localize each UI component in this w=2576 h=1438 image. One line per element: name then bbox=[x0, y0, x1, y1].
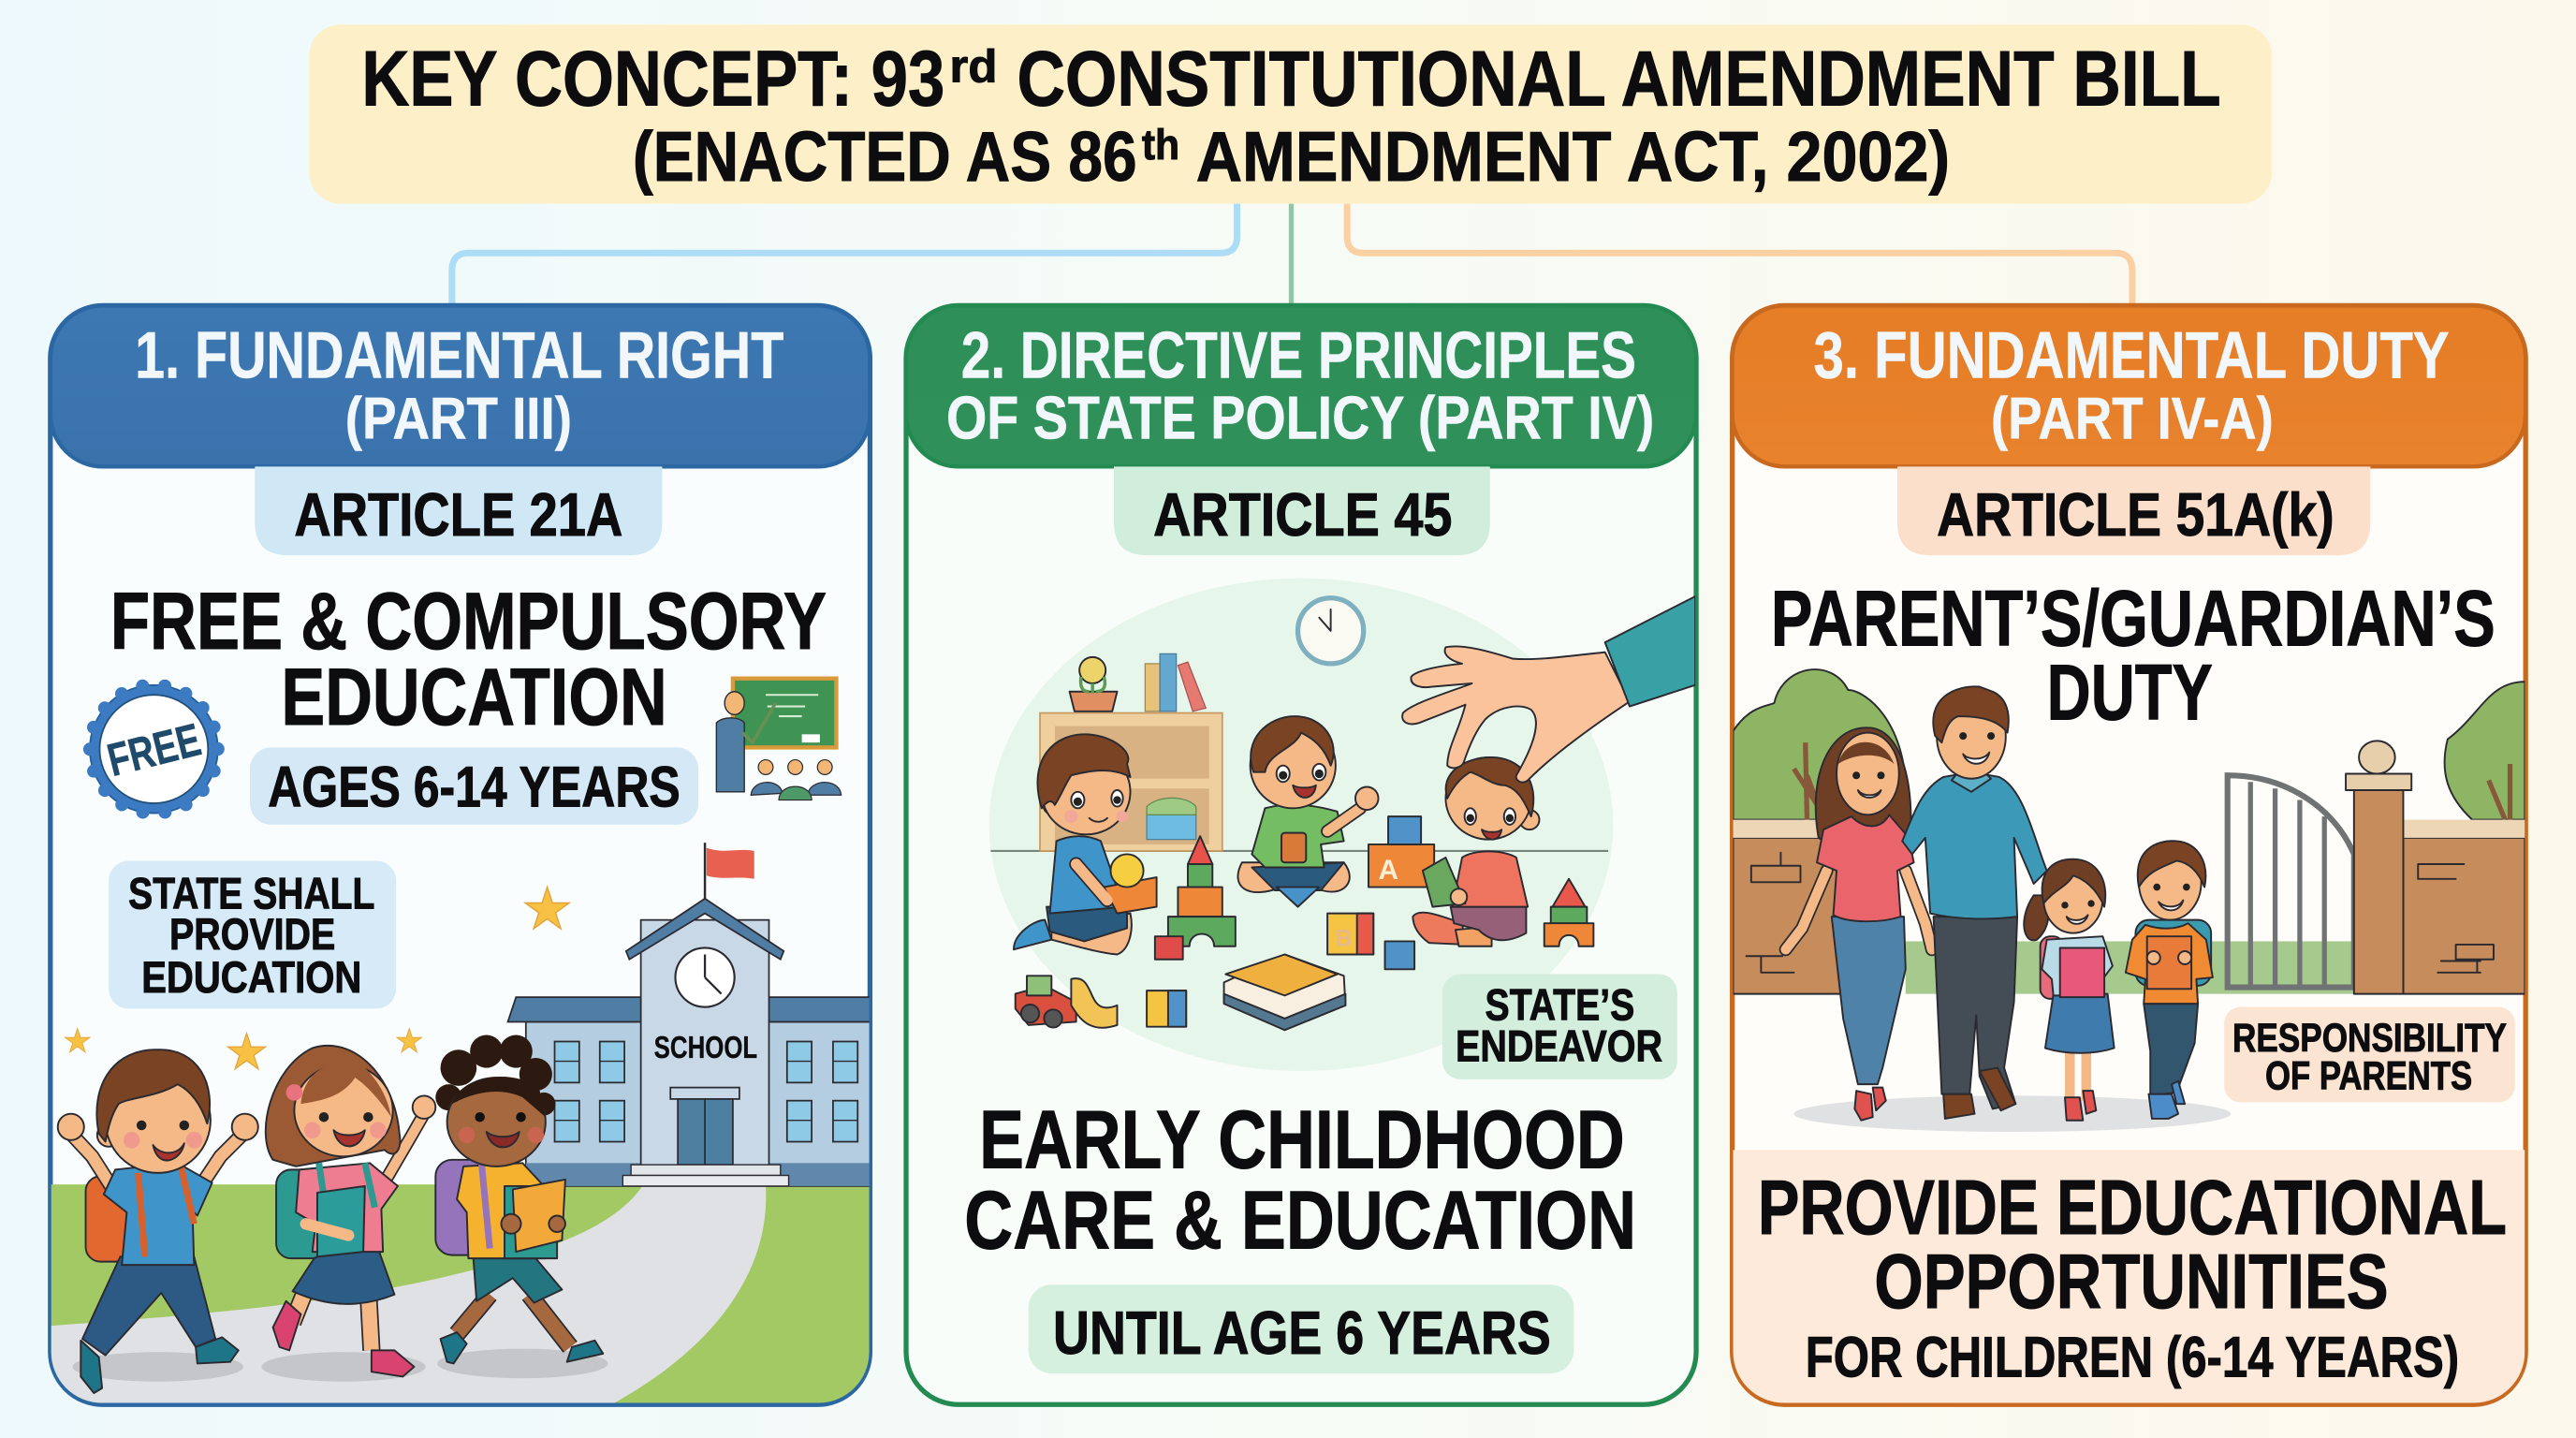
title banner: KEY CONCEPT: 93 bbox=[361, 35, 944, 122]
heading: free and compulsory education: EDUCATION bbox=[281, 653, 667, 742]
article pill: 45 bbox=[1114, 466, 1490, 555]
child: boy waving bbox=[58, 1049, 258, 1393]
title banner: th bbox=[1142, 121, 1179, 169]
header: fundamental duty: 3. FUNDAMENTAL DUTY bbox=[1814, 318, 2450, 392]
heading: free and compulsory education: FREE & COMPULSORY bbox=[110, 577, 827, 667]
age pill: 6-14 years: AGES 6-14 YEARS bbox=[268, 756, 681, 820]
illustration: early childhood play room bbox=[989, 579, 1695, 1071]
title banner: (ENACTED AS 86 bbox=[633, 117, 1137, 196]
title banner: rd bbox=[950, 42, 997, 93]
illustration: family at school gate bbox=[1734, 669, 2525, 1406]
panel: fundamental right bbox=[50, 305, 874, 1406]
icon: teacher at chalkboard bbox=[716, 679, 842, 800]
article pill: 21A: ARTICLE 21A bbox=[294, 480, 622, 549]
heading: parent's guardian's duty: DUTY bbox=[2047, 649, 2213, 737]
school building bbox=[508, 843, 874, 1186]
child: boy with books bbox=[435, 1034, 608, 1378]
header: directive principles bbox=[906, 305, 1696, 466]
callout: state shall provide education: PROVIDE bbox=[169, 910, 335, 960]
header: directive principles: OF STATE POLICY (PART IV) bbox=[946, 384, 1654, 452]
panel: directive principles bbox=[906, 305, 1696, 1404]
banner text: provide educational opportunities bbox=[1758, 1165, 2507, 1389]
shelf with plant and books bbox=[1040, 653, 1222, 851]
title banner: CONSTITUTIONAL AMENDMENT BILL bbox=[1017, 35, 2221, 122]
callout: state's endeavor: STATE’S bbox=[1486, 981, 1634, 1031]
father bbox=[1902, 686, 2047, 1119]
callout: responsibility of parents: RESPONSIBILITY bbox=[2232, 1016, 2507, 1061]
heading: free and compulsory education bbox=[110, 577, 827, 742]
child: seated boy with chick bbox=[1014, 734, 1157, 954]
child: girl with book bbox=[261, 1046, 435, 1382]
age pill: until 6 years bbox=[1029, 1284, 1573, 1373]
connector: title to directive principles bbox=[1290, 204, 1293, 305]
icon: free badge bbox=[90, 685, 218, 814]
heading: early childhood care and education: CARE & EDUCATION bbox=[964, 1175, 1636, 1267]
callout: responsibility of parents bbox=[2224, 1007, 2515, 1102]
callout: state shall provide education: EDUCATION bbox=[141, 953, 361, 1003]
school building: SCHOOL bbox=[654, 1031, 757, 1065]
header: fundamental duty bbox=[1733, 305, 2525, 466]
letter blocks and toys: B bbox=[1336, 927, 1353, 952]
connector: title to fundamental right bbox=[452, 204, 1237, 305]
block tower bbox=[1155, 836, 1236, 960]
banner text: provide educational opportunities: OPPORTUNITIES bbox=[1874, 1239, 2389, 1325]
daughter bbox=[2024, 859, 2115, 1121]
header: fundamental right bbox=[51, 305, 870, 466]
callout: state's endeavor bbox=[1442, 975, 1677, 1079]
callout: responsibility of parents: OF PARENTS bbox=[2265, 1053, 2472, 1098]
ground shadow bbox=[1793, 1095, 2231, 1132]
lawn bbox=[50, 1184, 871, 1406]
illustration: school scene bbox=[50, 843, 874, 1406]
lower banner background bbox=[1734, 1150, 2525, 1406]
son bbox=[2126, 841, 2213, 1119]
article pill: 51A(k) bbox=[1897, 466, 2370, 555]
panel: fundamental duty bbox=[1733, 305, 2525, 1406]
walkway bbox=[51, 1186, 766, 1406]
article pill: 51A(k): ARTICLE 51A(k) bbox=[1937, 480, 2334, 549]
child: seated boy in red bbox=[1412, 757, 1539, 946]
icon: free badge: FREE bbox=[103, 714, 206, 786]
letter blocks and toys: A bbox=[1379, 855, 1398, 886]
connector: title to fundamental duty bbox=[1347, 204, 2132, 305]
letter blocks and toys bbox=[1016, 816, 1593, 1030]
trees bbox=[1734, 669, 2525, 820]
callout: state's endeavor: ENDEAVOR bbox=[1456, 1022, 1662, 1072]
header: fundamental right: 1. FUNDAMENTAL RIGHT bbox=[135, 318, 783, 392]
article pill: 45: ARTICLE 45 bbox=[1153, 480, 1452, 549]
hand of the state bbox=[1402, 596, 1695, 783]
gate and pillar bbox=[2228, 741, 2411, 994]
mother bbox=[1786, 727, 1932, 1121]
article pill: 21A bbox=[255, 466, 662, 555]
header: directive principles: 2. DIRECTIVE PRINCIPLES bbox=[961, 318, 1636, 392]
heading: parent's guardian's duty bbox=[1771, 575, 2496, 737]
title banner bbox=[309, 24, 2272, 204]
grass and walls bbox=[1734, 820, 2525, 994]
callout: state shall provide education bbox=[109, 860, 396, 1008]
wall clock bbox=[1298, 598, 1364, 664]
star decorations bbox=[65, 888, 569, 1069]
header: fundamental duty: (PART IV-A) bbox=[1991, 387, 2274, 452]
child: seated boy in green bbox=[1237, 716, 1379, 907]
header: fundamental right: (PART III) bbox=[345, 387, 572, 452]
heading: early childhood care and education: EARLY CHILDHOOD bbox=[979, 1094, 1625, 1186]
callout: state shall provide education: STATE SHALL bbox=[128, 869, 374, 918]
heading: early childhood care and education bbox=[964, 1094, 1636, 1267]
title banner: AMENDMENT ACT, 2002) bbox=[1196, 117, 1950, 196]
age pill: until 6 years: UNTIL AGE 6 YEARS bbox=[1053, 1299, 1551, 1367]
